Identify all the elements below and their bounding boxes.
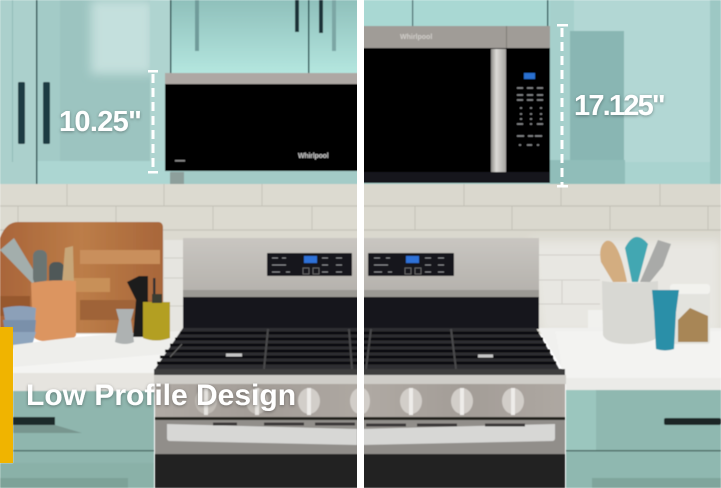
oven door handle right [362, 424, 555, 445]
cutting board [0, 222, 163, 333]
upper cabinets right [362, 0, 721, 184]
textured white crock [602, 281, 658, 344]
upper cabinets left [0, 0, 360, 184]
utensil crock [0, 238, 76, 342]
knobs left [195, 388, 370, 415]
range right half [354, 238, 566, 488]
utensils in crock [600, 237, 671, 282]
lower cabinets right [566, 390, 721, 488]
range left half [154, 238, 370, 488]
glass jar with treats [670, 284, 710, 344]
panel: right half, standard microwave kitchen [354, 0, 721, 488]
dimension line: 17.125 inches [557, 24, 568, 188]
tile backsplash right [362, 184, 721, 334]
label: 10.25 inches: 10.25" [59, 106, 141, 138]
accent bar [0, 327, 13, 463]
center divider [357, 0, 364, 488]
burner grates right [362, 328, 559, 369]
dimension line: 10.25 inches [148, 70, 158, 174]
knobs right [354, 388, 524, 415]
title: Low Profile Design: Low Profile Design [26, 379, 296, 412]
tile backsplash left [0, 172, 360, 335]
low profile microwave [165, 73, 360, 171]
microwave brand right: Whirlpool [400, 34, 432, 41]
microwave keypad [517, 73, 543, 145]
standard microwave [362, 26, 550, 183]
blue bowls [3, 306, 36, 349]
burner grates left [155, 328, 360, 369]
lower cabinets left [0, 391, 154, 488]
pepper mill and oil bottle [115, 276, 170, 344]
label: 17.125 inches: 17.125" [574, 90, 664, 122]
panel: left half, low profile microwave kitchen [0, 0, 370, 488]
control panel right [368, 253, 454, 276]
oven door handle left [167, 424, 357, 445]
microwave brand: Whirlpool [298, 153, 329, 160]
blue glasses [652, 290, 679, 350]
microwave door handle [491, 49, 506, 172]
countertop right [538, 328, 721, 390]
control panel left [267, 253, 352, 276]
countertop left [13, 331, 182, 391]
